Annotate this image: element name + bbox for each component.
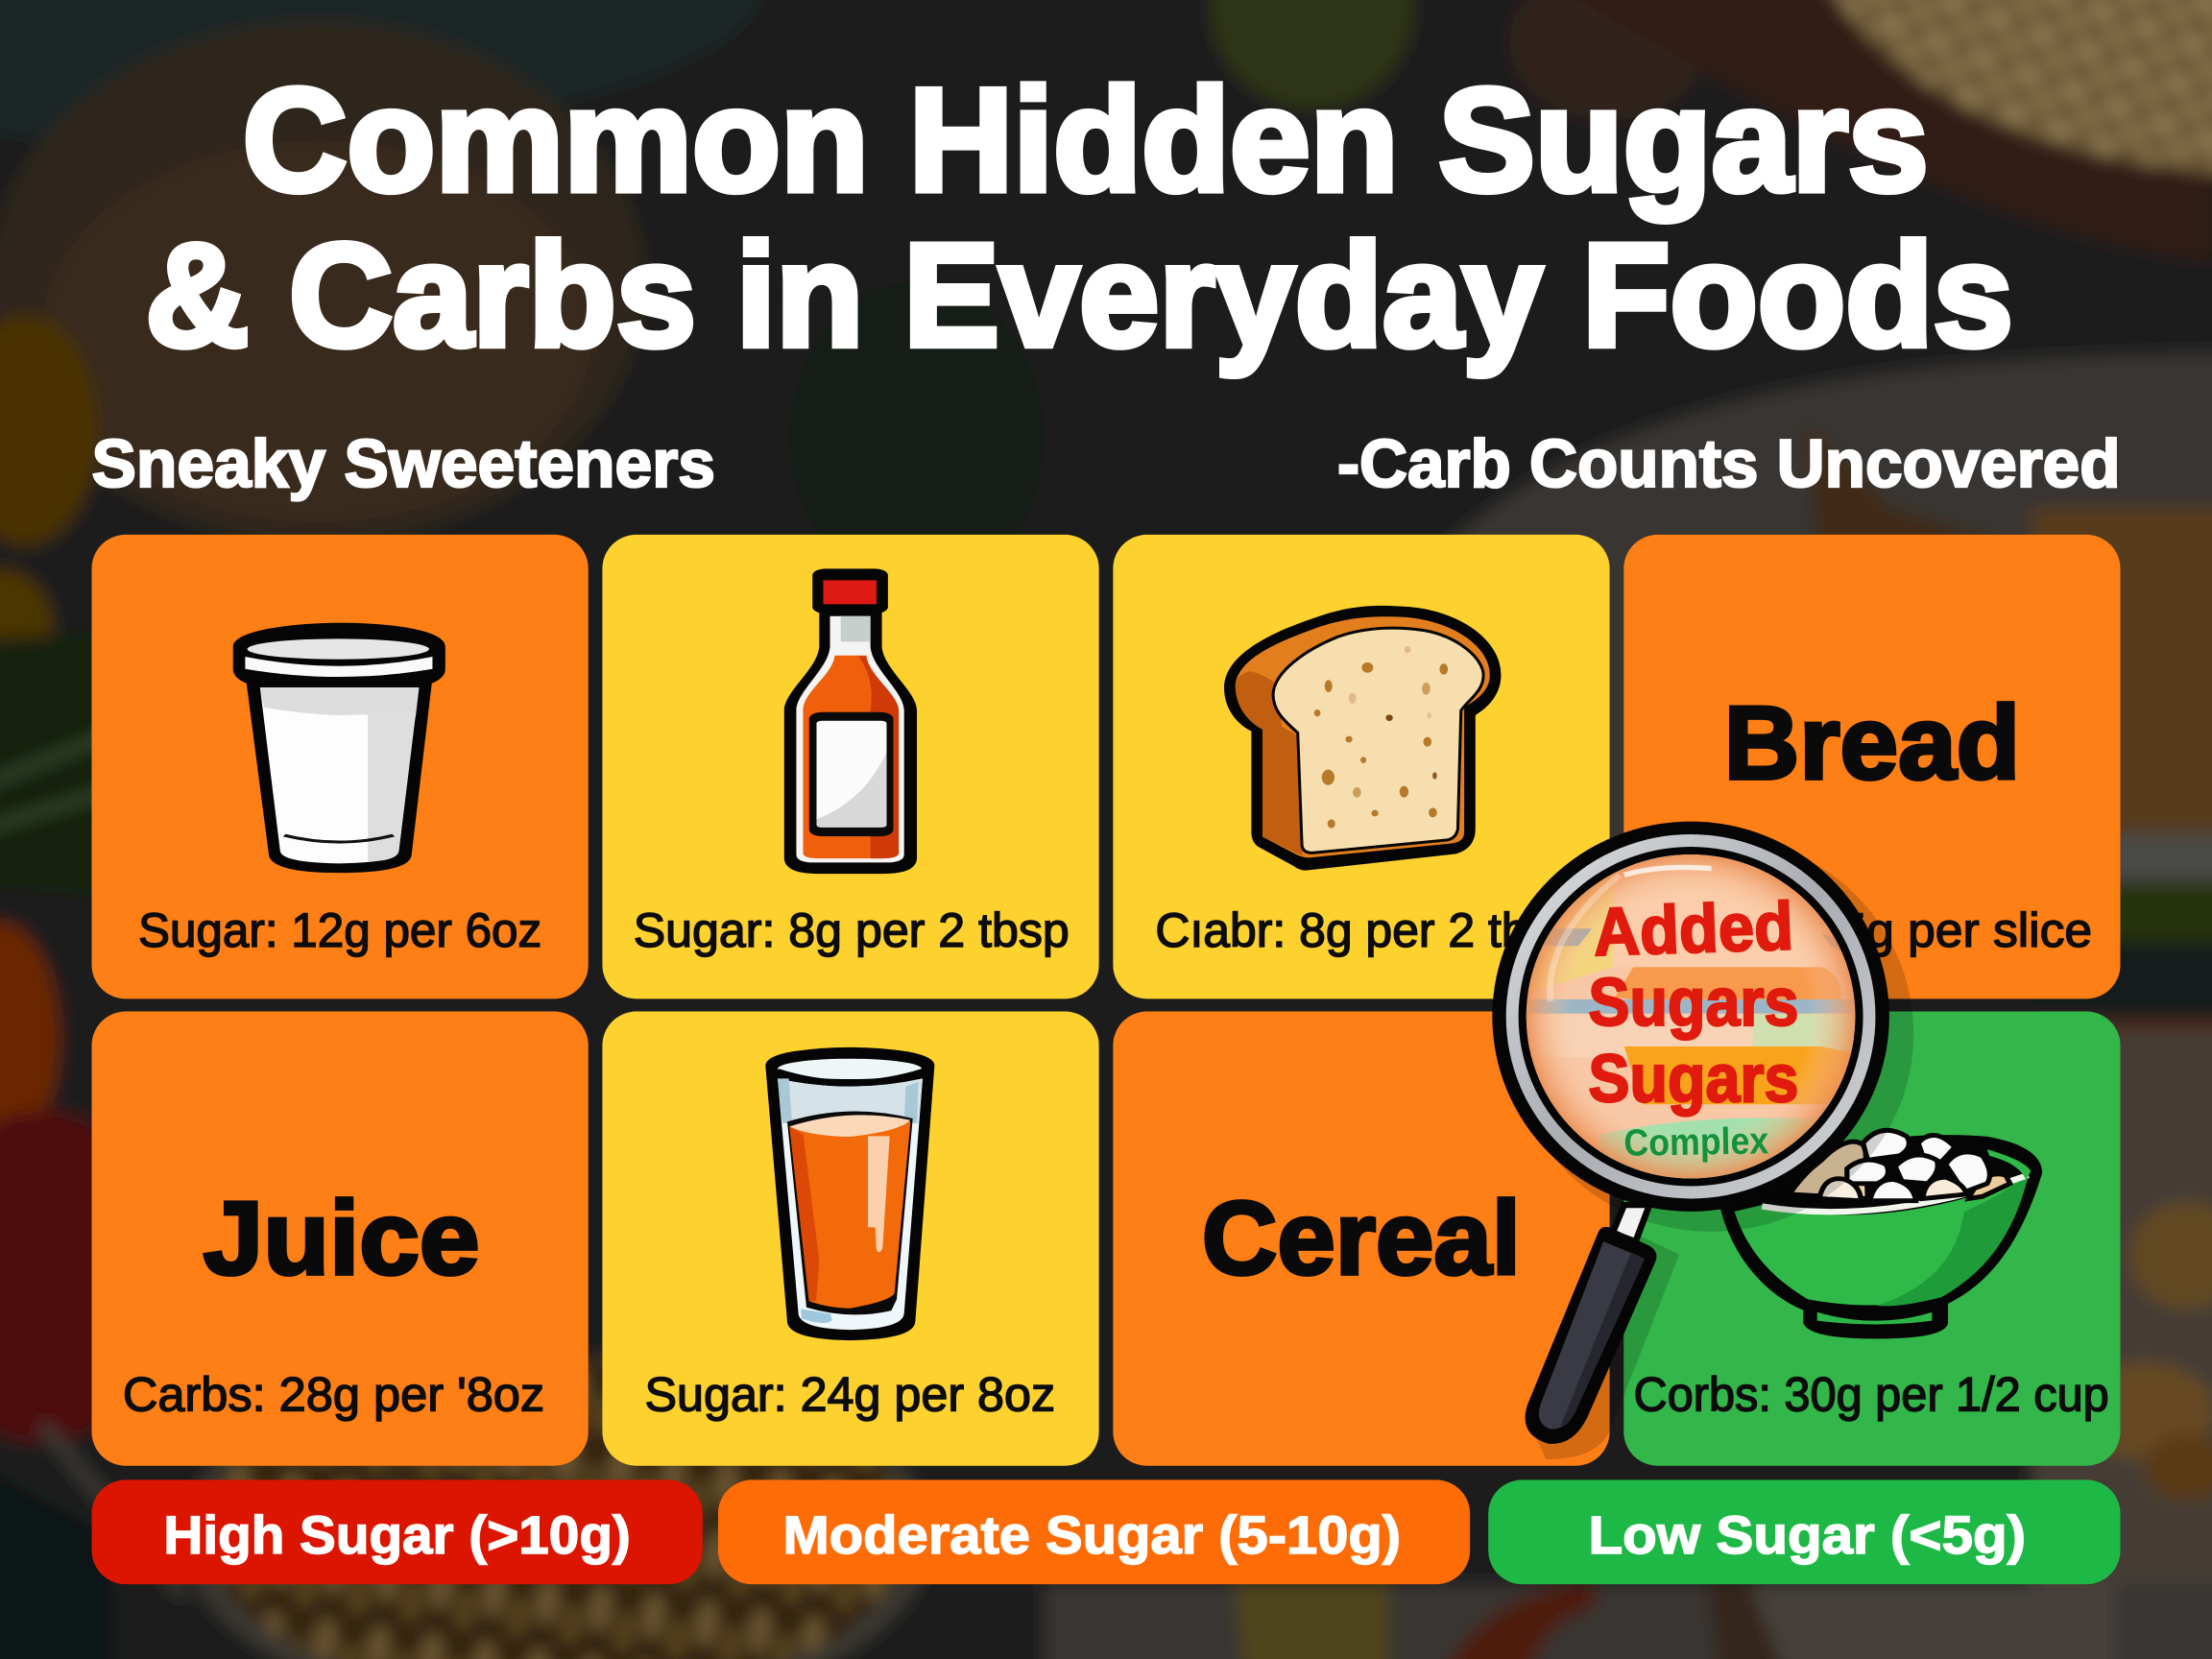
panel: sauce bottle <box>602 535 1099 998</box>
panel: cereal <box>1113 1012 1610 1466</box>
legend <box>92 1479 2120 1584</box>
magnifier shadow <box>1509 835 1913 1459</box>
lens text: Sugars: Sugars <box>1588 965 1799 1041</box>
panel: yogurt cup <box>92 535 589 998</box>
food name: Cereal <box>1202 1181 1521 1297</box>
panel: bread <box>1623 535 2120 998</box>
card value: Corbs: 30g per 1/2 cup <box>1634 1367 2109 1421</box>
card value: Sugar: 12g per 6oz <box>138 903 541 957</box>
lens text: Complex: Complex <box>1623 1119 1769 1165</box>
title <box>145 59 2013 377</box>
legend: moderate sugar: Moderate Sugar (5-10g) <box>783 1504 1401 1565</box>
icon: bread slice <box>1224 606 1501 871</box>
legend: high sugar: High Sugar (>10g) <box>163 1504 631 1565</box>
legend: low sugar: Low Sugar (<5g) <box>1589 1504 2026 1565</box>
lens text: Sugars repeated: Sugars <box>1588 1042 1799 1117</box>
title line 1: Common Hidden Sugars <box>243 59 1929 222</box>
panel: bread slice <box>1113 535 1610 998</box>
magnified lens <box>1523 852 1859 1186</box>
panel: juice glass <box>602 1012 1099 1466</box>
icon: white cup <box>233 623 445 873</box>
card value: Sugar: 8g per 2 tbsp <box>634 903 1070 957</box>
card value: Carbs: 28g per '8oz <box>123 1367 544 1421</box>
legend: low sugar <box>1488 1479 2120 1584</box>
panel: cereal bowl <box>1623 1012 2120 1466</box>
card value: Carbs: 15g per slice <box>1652 903 2092 957</box>
legend: high sugar <box>92 1479 703 1584</box>
magnifier handle <box>1526 1205 1656 1444</box>
card value: Cıabr: 8g per 2 tbsp <box>1155 903 1578 957</box>
subheading left: Sneaky Sweeteners <box>92 425 715 501</box>
lens text: Added: Added <box>1592 889 1794 971</box>
food name: Bread <box>1724 685 2020 802</box>
icon: sauce bottle <box>784 568 917 874</box>
icon: cereal bowl <box>1720 1130 2042 1338</box>
food name: Juice <box>204 1181 480 1297</box>
legend: moderate sugar <box>718 1479 1470 1584</box>
icon: magnifying glass <box>1492 822 1913 1459</box>
magnifier ring <box>1492 822 1889 1212</box>
icon: glass of orange juice <box>765 1047 934 1340</box>
panel: juice <box>92 1012 589 1466</box>
card value: Sugar: 24g per 8oz <box>645 1367 1055 1421</box>
subheading right: -Carb Counts Uncovered <box>1337 425 2120 501</box>
title line 2: & Carbs in Everyday Foods <box>145 214 2013 377</box>
